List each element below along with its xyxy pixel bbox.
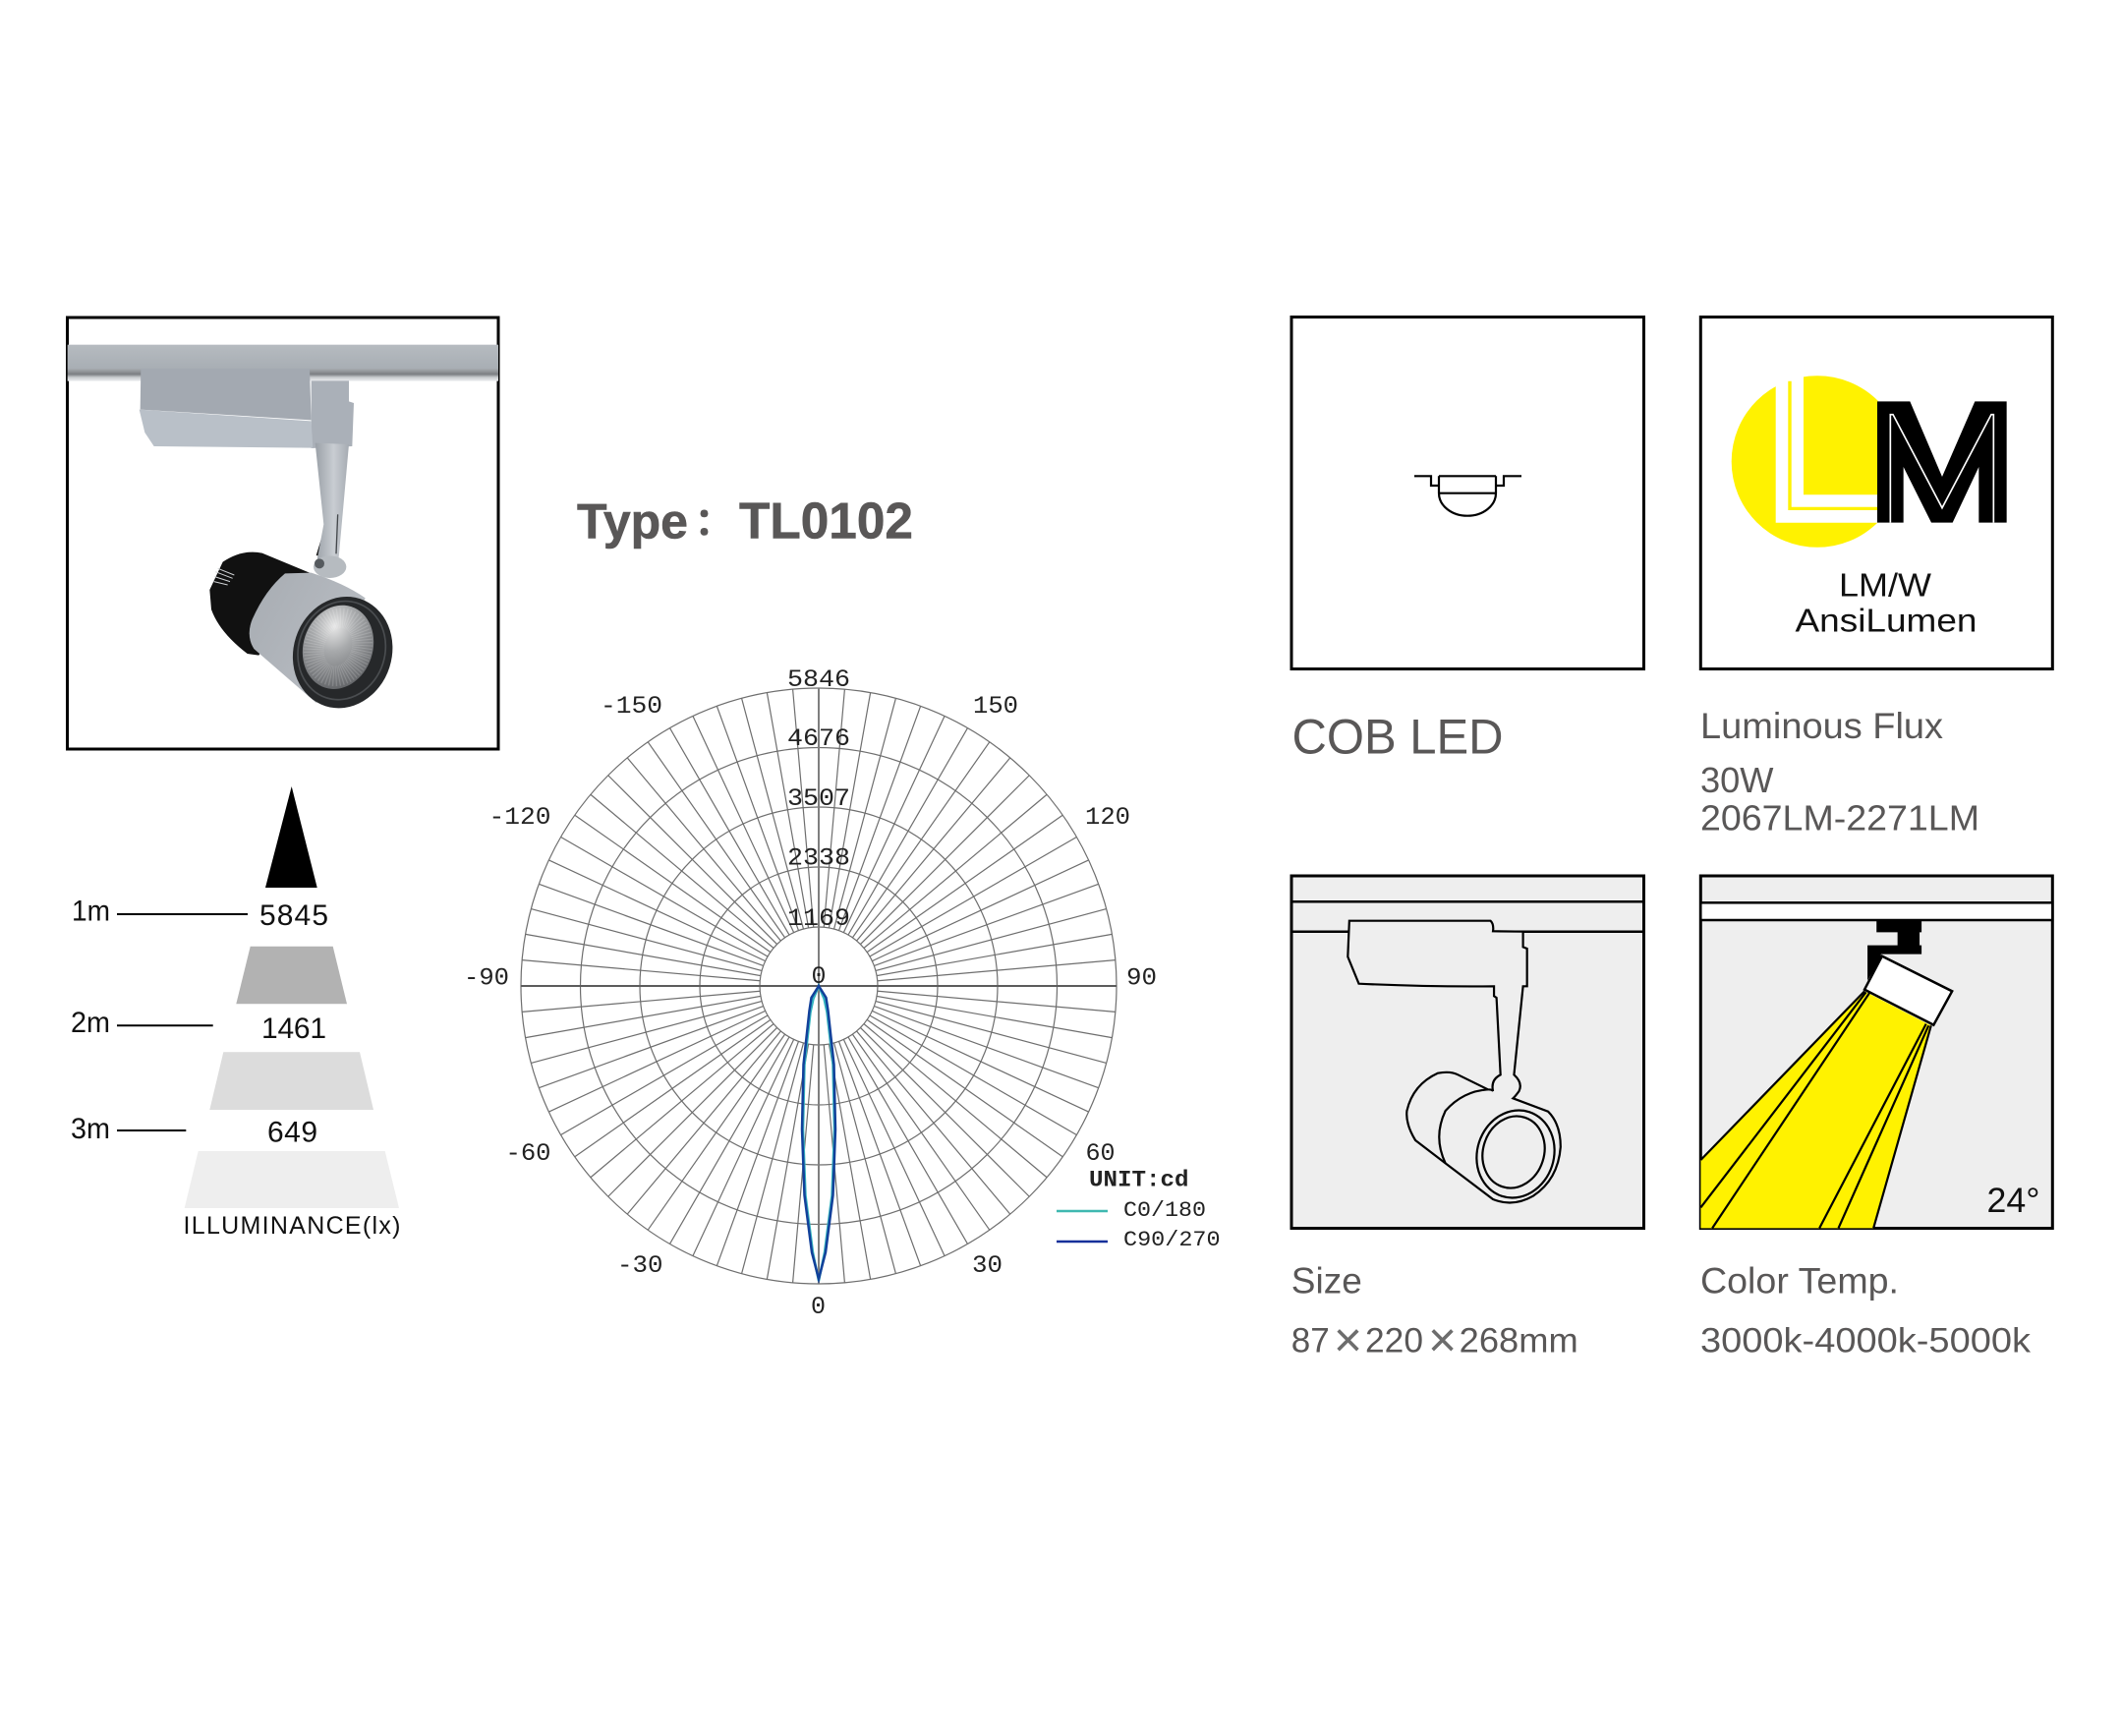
icon: LM logo [1732,369,2007,548]
text: size: × [1428,1312,1457,1367]
label: COB LED: COB LED [1291,710,1504,765]
angle labels: -60 [505,1139,550,1168]
panel: size drawing [1291,876,1643,1229]
angle labels: -30 [617,1251,662,1280]
angle labels: -90 [464,963,509,993]
ring value labels: 2338 [787,843,850,873]
label: 3m [71,1113,186,1145]
angle labels: 0 [811,1293,826,1321]
photo: track light [68,345,498,722]
text: luminous flux specs: Luminous Flux [1700,706,1944,746]
legend: C90/270 [1123,1228,1221,1252]
angle labels: -150 [601,692,662,721]
curve: C90/270 [802,986,835,1279]
angle labels: -120 [489,803,550,832]
text: color temp [1700,1260,2032,1360]
angle labels [464,692,1157,1321]
band 1m [236,947,347,1004]
text: LM/W AnsiLumen: AnsiLumen [1795,602,1978,638]
ring value labels [787,665,850,991]
band 3m [185,1151,399,1208]
text: size: Size [1291,1260,1362,1301]
text: size [1291,1260,1578,1367]
text: size: × [1334,1312,1362,1367]
value: 1461: 1461 [261,1013,326,1045]
title: Type [577,493,688,549]
angle labels: 90 [1126,963,1157,993]
legend: UNIT:cd [1089,1168,1189,1193]
value: 649: 649 [267,1117,317,1148]
white track band [1700,902,2052,920]
panel: beam angle [1700,876,2052,1229]
label: 2m: 2m [71,1007,110,1039]
chart: illuminance cone [71,786,401,1240]
ring value labels: 1169 [787,904,850,933]
icon: lamp outline [1347,921,1561,1202]
ring value labels: 5846 [787,665,850,694]
ring value labels: 3507 [787,784,850,813]
polar grid [521,688,1117,1284]
text: size: 268mm [1460,1321,1578,1360]
chart: polar light distribution [464,665,1221,1321]
text: color temp: 3000k-4000k-5000k [1700,1321,2032,1360]
angle labels: 30 [972,1251,1003,1280]
value: 5845: 5845 [259,899,328,932]
icon: black light cone tip [265,786,317,888]
text: LM/W AnsiLumen: LM/W [1839,567,1932,604]
text: luminous flux specs [1700,706,1979,839]
text: size: 220 [1365,1321,1423,1360]
text: luminous flux specs: 30W [1700,760,1774,800]
text: size: 87 [1291,1321,1330,1360]
angle labels: 120 [1085,803,1130,832]
title: ： [695,502,732,544]
title: TL0102 [739,492,913,550]
panel: COB LED [1291,317,1643,668]
caption: illuminance: ILLUMINANCE(lx) [183,1212,401,1240]
label: 1m: 1m [72,896,110,928]
band 2m [209,1052,373,1110]
ring value labels: 4676 [787,724,850,753]
angle labels: 60 [1085,1139,1115,1168]
icon: beam and lamp [1700,920,1952,1228]
angle labels: 150 [973,692,1018,721]
text: luminous flux specs: 2067LM-2271LM [1700,798,1979,839]
legend [1057,1168,1221,1252]
label: 3m: 3m [71,1113,110,1145]
text: beam angle: 24° [1987,1182,2040,1220]
panel: luminous flux [1700,317,2052,668]
panel: product photo [67,318,498,749]
ring value labels: 0 [811,962,827,991]
icon: COB downlight [1414,476,1521,516]
text: LM/W AnsiLumen [1795,567,1978,638]
legend: C0/180 [1123,1198,1206,1223]
text: color temp: Color Temp. [1700,1260,1899,1301]
curve: C0/180 [803,986,834,1281]
